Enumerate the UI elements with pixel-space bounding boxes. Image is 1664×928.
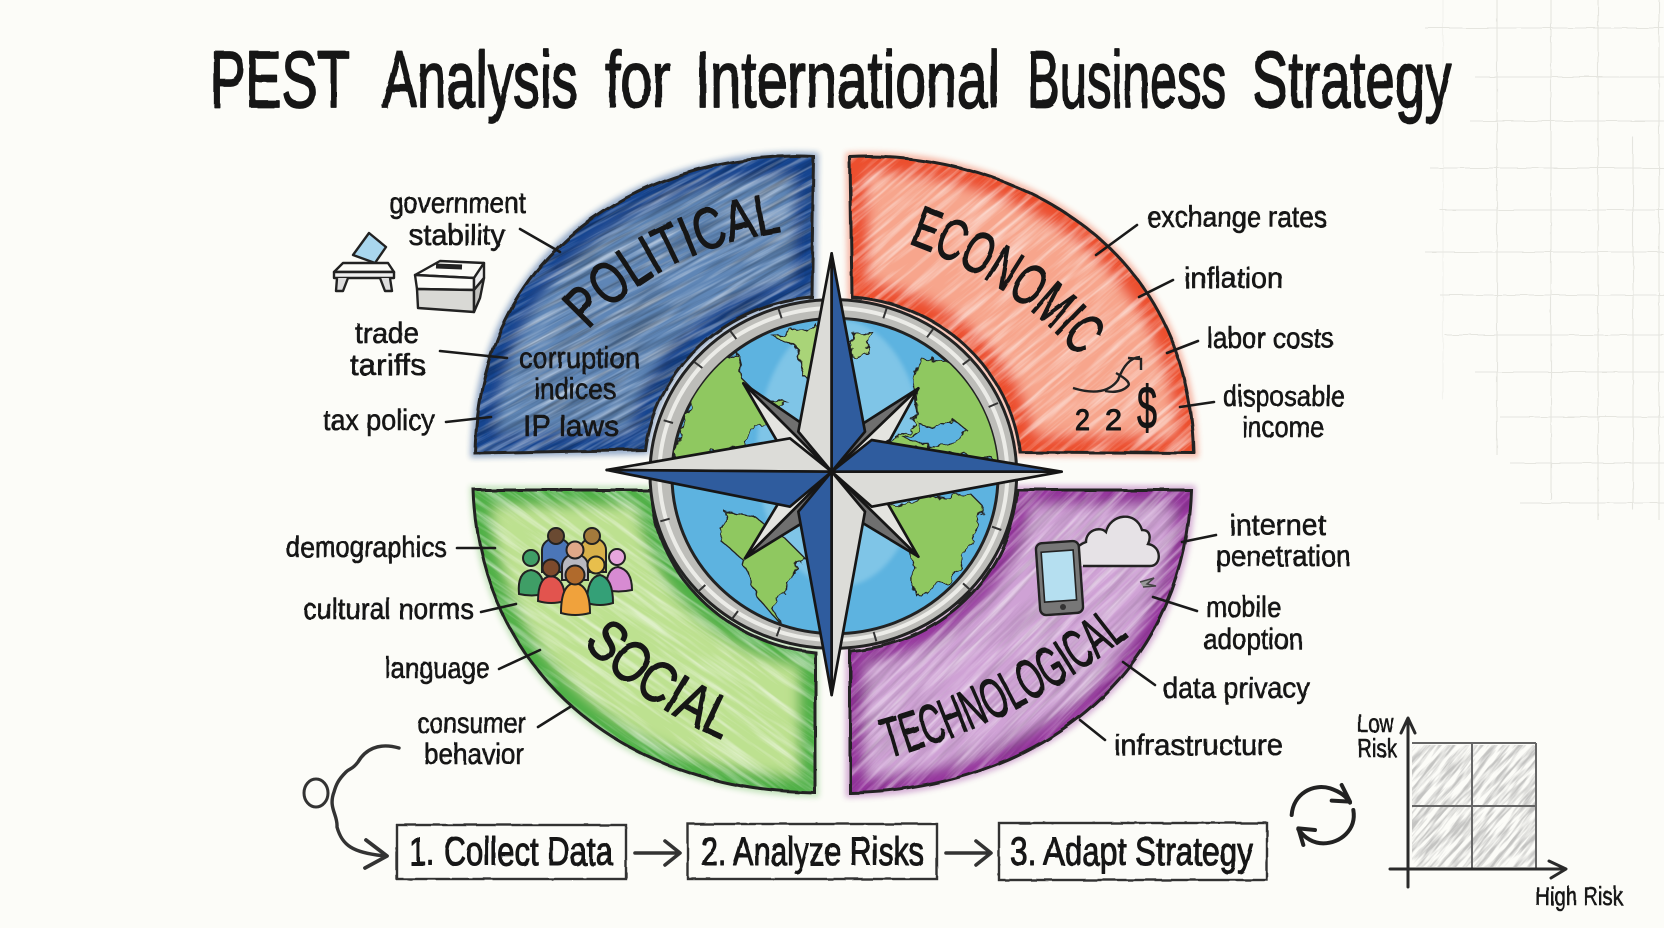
heading: social: SOCIAL xyxy=(588,621,724,740)
labels: political: trade xyxy=(355,317,419,350)
labels: social: demographics xyxy=(286,531,447,564)
background sketch grid xyxy=(1425,0,1664,520)
heading: technological: TECHNOLOGICAL xyxy=(878,612,1129,756)
north point xyxy=(798,253,865,472)
risk matrix xyxy=(1358,714,1624,912)
heading: economic: ECONOMIC xyxy=(910,206,1103,352)
labels: economic: inflation xyxy=(1184,262,1283,295)
axis label: low risk: Low xyxy=(1357,708,1394,738)
east point xyxy=(832,440,1062,507)
title: Analysis xyxy=(382,35,578,124)
labels: political xyxy=(323,187,560,437)
labels: social: behavior xyxy=(424,738,524,771)
arrow: step 1 to 2 xyxy=(635,841,680,865)
labels: technological: infrastructure xyxy=(1114,729,1283,762)
title: Strategy xyxy=(1252,35,1452,124)
labels: social: language xyxy=(385,652,490,685)
axis label: high risk: High Risk xyxy=(1535,881,1624,911)
labels: social xyxy=(286,531,570,771)
sea: mediterranean xyxy=(903,418,965,444)
text: corruption indices: corruption xyxy=(519,342,640,375)
continent: greenland xyxy=(773,325,820,383)
compass ring xyxy=(650,300,1017,648)
labels: political: stability xyxy=(409,219,505,252)
labels: economic: disposable xyxy=(1223,380,1345,413)
icon: cycle arrows xyxy=(1292,785,1354,845)
feedback loop arrow xyxy=(304,746,399,868)
process step 2 xyxy=(688,824,937,879)
continent: south america xyxy=(720,512,803,623)
labels: social: cultural norms xyxy=(303,593,474,626)
panel: economic xyxy=(842,148,1202,461)
labels: economic: exchange rates xyxy=(1147,201,1327,234)
text: IP laws: IP laws xyxy=(523,410,619,443)
process step 2: 2. Analyze Risks xyxy=(701,830,924,874)
title: for xyxy=(605,35,671,124)
axis label: low risk xyxy=(1357,708,1398,763)
icon: rising curve and money: 2 xyxy=(1075,404,1090,437)
panel: social xyxy=(467,483,822,800)
process step 1: 1. Collect Data xyxy=(409,830,614,874)
globe xyxy=(672,318,1007,634)
icon: rising curve and money: 2 xyxy=(1105,404,1122,437)
heading: political: POLITICAL xyxy=(561,195,781,328)
labels: political: government xyxy=(389,187,527,220)
title: PEST xyxy=(210,35,350,124)
labels: technological: penetration xyxy=(1216,540,1351,573)
process step 1 xyxy=(397,825,626,879)
continent: iceland xyxy=(852,333,875,357)
labels: technological: adoption xyxy=(1203,623,1303,656)
panel: political xyxy=(466,148,822,462)
labels: social: consumer xyxy=(417,707,526,740)
icon: small mark xyxy=(1140,578,1156,587)
south point xyxy=(798,472,865,695)
compass rose xyxy=(607,253,1062,695)
icon: group of people xyxy=(519,528,632,615)
compass ring and globe xyxy=(607,253,1062,695)
continent: eurasia xyxy=(885,358,1007,460)
labels: political: tariffs xyxy=(350,349,426,382)
axis label: low risk: Risk xyxy=(1357,733,1398,763)
labels: economic: labor costs xyxy=(1207,322,1334,355)
text: corruption indices xyxy=(519,342,640,406)
continent: africa xyxy=(885,493,983,594)
labels: economic: income xyxy=(1242,411,1324,444)
labels: technological: internet xyxy=(1229,509,1327,542)
west point xyxy=(607,438,832,507)
icon: cloud xyxy=(1073,517,1159,566)
labels: technological: mobile xyxy=(1206,591,1281,624)
title: International xyxy=(695,35,1000,124)
arrow: step 2 to 3 xyxy=(946,841,991,865)
ring ticks xyxy=(660,308,1001,641)
title: Business xyxy=(1027,35,1226,124)
icon: rising curve and money xyxy=(1073,357,1157,441)
title xyxy=(210,35,1452,124)
text: corruption indices: indices xyxy=(534,373,616,406)
icon: ballot box xyxy=(415,261,484,312)
labels: technological xyxy=(1080,509,1351,762)
labels: political: tax policy xyxy=(323,404,435,437)
labels: economic xyxy=(1096,201,1345,444)
icon: mobile phone xyxy=(1036,541,1083,615)
labels: technological: data privacy xyxy=(1163,672,1310,705)
diagonal points xyxy=(743,383,918,558)
icon: ballot on table xyxy=(334,233,394,291)
panel: technological xyxy=(842,482,1199,801)
continent: north america xyxy=(675,352,788,460)
process step 3 xyxy=(999,823,1267,880)
process step 3: 3. Adapt Strategy xyxy=(1010,830,1253,874)
icon: rising curve and money: $ xyxy=(1137,374,1157,441)
